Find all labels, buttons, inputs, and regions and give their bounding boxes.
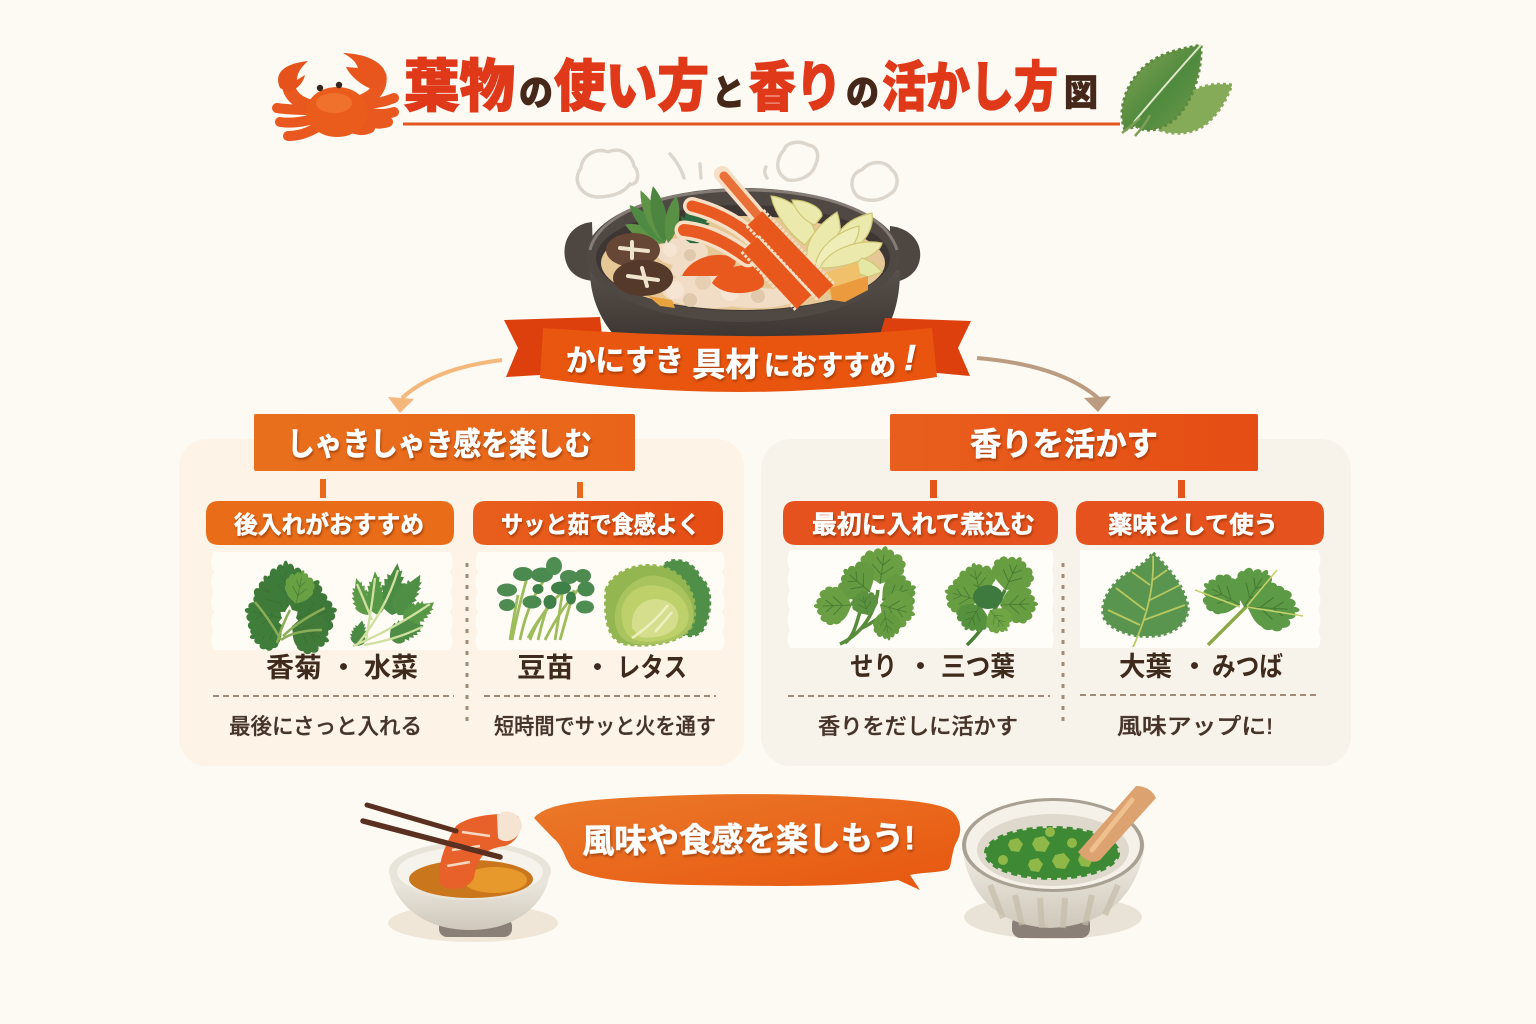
connector right xyxy=(577,482,583,498)
card: サッと茹で xyxy=(473,501,724,739)
icon: lettuce xyxy=(606,560,710,645)
pot rim xyxy=(586,188,900,322)
label: toumyou lettuce: 豆苗 xyxy=(517,653,574,683)
label: shungiku mizuna: 香菊 xyxy=(266,653,322,683)
icon: mizuna xyxy=(346,562,440,647)
heading: aroma xyxy=(890,414,1258,471)
note: 最後にさっと入れる xyxy=(229,714,422,739)
icon: shungiku xyxy=(240,560,342,660)
note: 香りをだしに活かす xyxy=(818,714,1018,739)
arrow: to left category xyxy=(388,360,502,413)
card: 薬味: 薬味として使う xyxy=(1108,512,1278,539)
title: の xyxy=(846,72,879,113)
connector right xyxy=(1178,480,1185,498)
label: shungiku mizuna: ・ xyxy=(330,653,357,683)
title: 使い方 xyxy=(554,55,709,118)
connector left xyxy=(930,480,937,498)
ribbon text: かにすき xyxy=(566,345,684,378)
napa cabbage xyxy=(771,196,882,277)
heading: shakishaki xyxy=(254,414,635,471)
card: 最初に xyxy=(783,501,1058,739)
label: ooba mitsuba: みつば xyxy=(1212,652,1283,682)
illustration: crab hotpot xyxy=(564,174,920,340)
ribbon text: におすすめ xyxy=(764,350,896,381)
note: 短時間でサッと火を通す xyxy=(494,714,716,739)
ribbon text xyxy=(566,337,916,383)
title underline xyxy=(403,122,1120,126)
label: seri mitsuba xyxy=(850,652,1015,682)
speech bubble: 風味や食感を楽しもう! xyxy=(582,819,915,860)
title: 図 xyxy=(1064,72,1098,113)
crab meat xyxy=(439,814,521,889)
pestle xyxy=(1078,786,1156,862)
ribbon tails xyxy=(504,317,602,377)
icon: ooba xyxy=(1103,553,1188,647)
card: 後入れ: 後入れがおすすめ xyxy=(234,511,424,539)
label: shungiku mizuna xyxy=(266,653,418,683)
card: サッと茹で: サッと茹で食感よく xyxy=(501,512,700,539)
title: 香り xyxy=(749,58,842,118)
title xyxy=(404,55,1098,119)
speech bubble xyxy=(534,794,960,890)
connector left xyxy=(320,479,326,498)
shiitake mushrooms xyxy=(606,233,673,296)
card: 最初に: 最初に入れて煮込む xyxy=(812,511,1035,539)
icon: steam clouds xyxy=(577,142,897,200)
card: 後入れ xyxy=(206,501,454,739)
icon: shiso leaves xyxy=(1122,45,1232,136)
ribbon banner xyxy=(504,317,971,392)
arrow: to right category xyxy=(977,358,1111,412)
title: 活かし方 xyxy=(882,58,1058,118)
rice and crab meat xyxy=(656,238,797,308)
panel: right category aroma xyxy=(761,414,1351,766)
icon: mitsuba leaf xyxy=(1194,558,1303,645)
ground herbs xyxy=(986,828,1118,878)
title: 葉物 xyxy=(404,55,515,119)
label: seri mitsuba: ・ xyxy=(907,652,934,682)
carrot and tofu xyxy=(822,262,862,295)
icon: seri xyxy=(813,543,923,644)
crab chunks xyxy=(682,255,736,276)
greens xyxy=(622,185,716,249)
label: ooba mitsuba xyxy=(1119,652,1283,682)
title: の xyxy=(519,72,553,113)
crab legs xyxy=(684,174,826,302)
title: と xyxy=(712,72,745,113)
ribbon main xyxy=(540,328,937,392)
heading: aroma: 香りを活かす xyxy=(970,426,1158,462)
ribbon text: 具材 xyxy=(692,346,759,383)
chopsticks xyxy=(367,805,456,831)
pot body xyxy=(590,270,900,340)
heading: shakishaki: しゃきしゃき感を楽しむ xyxy=(287,426,592,462)
illustration: mortar with greens xyxy=(962,786,1156,939)
note: 風味アップに! xyxy=(1117,714,1273,739)
ribbon text: ! xyxy=(904,337,916,378)
label: toumyou lettuce: ・ xyxy=(584,653,611,683)
label: toumyou lettuce xyxy=(517,653,687,683)
label: ooba mitsuba: 大葉 xyxy=(1119,652,1172,682)
label: seri mitsuba: 三つ葉 xyxy=(941,652,1015,682)
label: shungiku mizuna: 水菜 xyxy=(364,653,418,683)
label: ooba mitsuba: ・ xyxy=(1181,652,1208,682)
icon: pea shoots xyxy=(497,557,594,640)
card: 薬味 xyxy=(1076,501,1324,739)
illustration: dipping bowl with crab xyxy=(363,805,558,942)
icon: crab xyxy=(277,53,394,137)
label: toumyou lettuce: レタス xyxy=(617,653,687,683)
panel: left category shakishaki xyxy=(179,414,744,766)
label: seri mitsuba: せり xyxy=(850,652,897,682)
icon: mitsuba xyxy=(940,548,1040,645)
pot handles xyxy=(564,222,594,281)
